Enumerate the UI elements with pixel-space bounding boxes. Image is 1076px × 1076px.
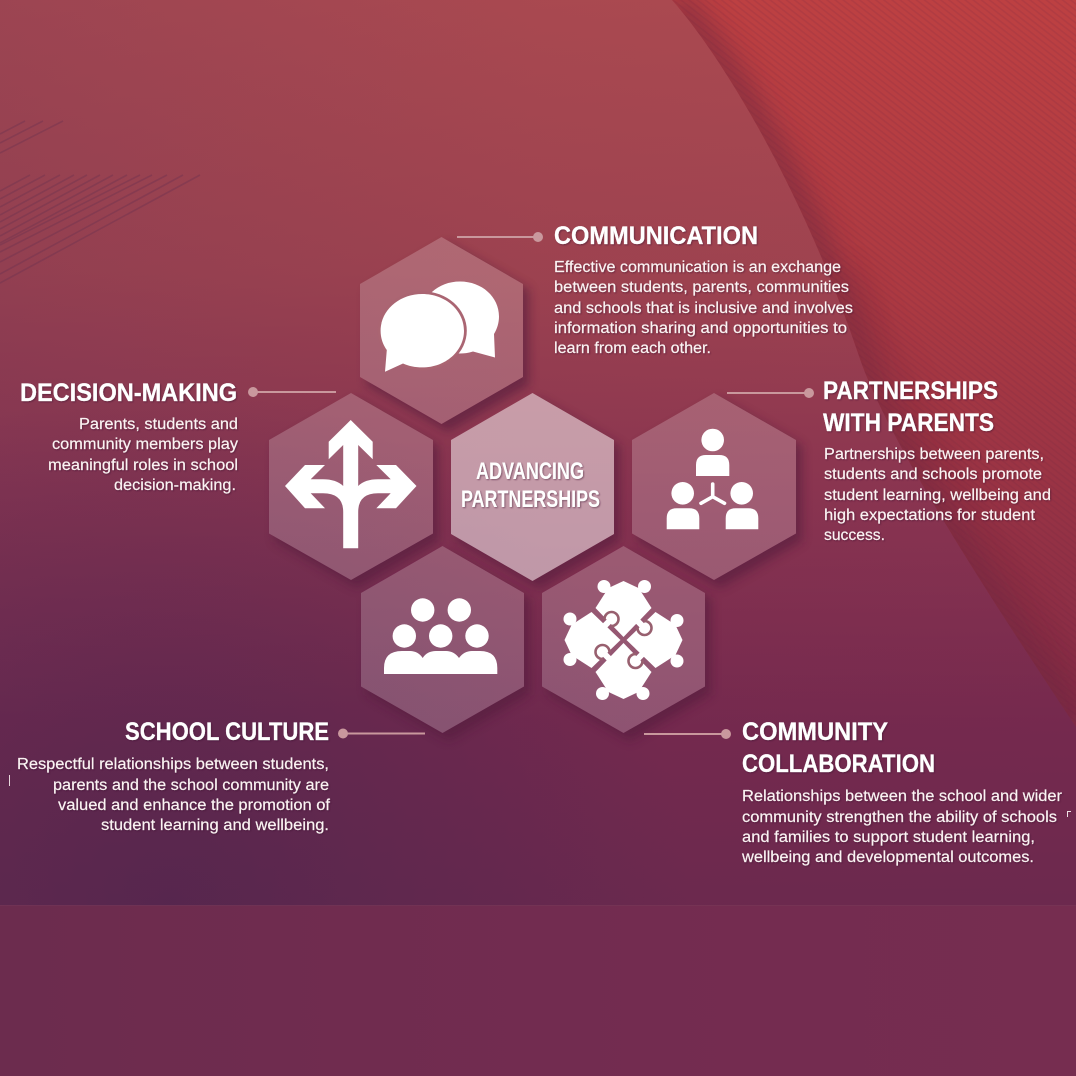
text: communication: information sharing and opportunities to	[554, 320, 847, 337]
text: school culture: SCHOOL CULTURE	[125, 718, 329, 746]
hexagon: partnerships with parents	[632, 393, 796, 580]
text: decision-making	[20, 379, 238, 494]
hexagon: school culture	[361, 546, 524, 733]
text: school culture: parents and the school community are	[53, 777, 329, 794]
hexagon shadows	[275, 243, 802, 741]
text: communication: learn from each other.	[554, 340, 711, 357]
icon: three connected people	[667, 429, 758, 529]
text: partnerships with parents: PARTNERSHIPS	[823, 377, 998, 405]
connector: decision-making	[248, 387, 336, 397]
text: community collaboration: COLLABORATION	[742, 750, 935, 778]
hexagon: decision-making	[269, 393, 433, 580]
hexagon: community collaboration	[542, 546, 705, 733]
text: decision-making: DECISION-MAKING	[20, 379, 237, 407]
text: communication: COMMUNICATION	[554, 222, 758, 250]
text: decision-making: meaningful roles in school	[48, 457, 238, 474]
text: school culture: Respectful relationships between students,	[17, 756, 329, 773]
text: community collaboration: wellbeing and developmental outcomes.	[741, 849, 1034, 866]
text: partnerships with parents	[823, 377, 1051, 544]
text: decision-making: decision-making.	[114, 477, 236, 494]
text: decision-making: community members play	[52, 436, 238, 453]
text: communication: and schools that is inclusive and involves	[554, 300, 853, 317]
text: community collaboration: COMMUNITY	[742, 718, 888, 746]
icon: branching arrows	[285, 420, 416, 548]
text: partnerships with parents: success.	[824, 527, 885, 544]
centre label: ADVANCING	[476, 458, 584, 485]
text: school culture	[17, 718, 331, 834]
text: community collaboration	[741, 718, 1062, 866]
text: partnerships with parents: students and schools promote	[824, 466, 1042, 483]
connector: partnerships	[727, 388, 814, 398]
text: communication: between students, parents, communities	[554, 279, 849, 296]
connector: community collaboration	[644, 729, 731, 739]
text: partnerships with parents: high expectations for student	[824, 507, 1036, 524]
text: decision-making: Parents, students and	[79, 416, 238, 433]
text: community collaboration: Relationships between the school and wider	[742, 788, 1062, 805]
text: partnerships with parents: WITH PARENTS	[823, 409, 994, 437]
text: school culture: student learning and wellbeing.	[101, 817, 329, 834]
connector: school culture	[338, 728, 425, 738]
text: communication: Effective communication is an exchange	[554, 259, 841, 276]
hexagon: centre	[451, 393, 614, 581]
centre label	[461, 458, 600, 513]
hexagon: communication	[360, 237, 523, 424]
text: community collaboration: and families to support student learning,	[742, 829, 1035, 846]
text: community collaboration: community strengthen the ability of schools	[742, 809, 1057, 826]
icon: speech bubbles	[378, 282, 499, 372]
text: communication	[554, 222, 853, 357]
text: school culture: valued and enhance the promotion of	[58, 797, 331, 814]
text: partnerships with parents: Partnerships between parents,	[824, 446, 1044, 463]
connector: communication	[457, 232, 543, 242]
icon: group of people	[384, 598, 497, 674]
centre label: PARTNERSHIPS	[461, 486, 600, 513]
text: partnerships with parents: student learning, wellbeing and	[824, 487, 1051, 504]
icon: puzzle pieces	[564, 580, 684, 700]
